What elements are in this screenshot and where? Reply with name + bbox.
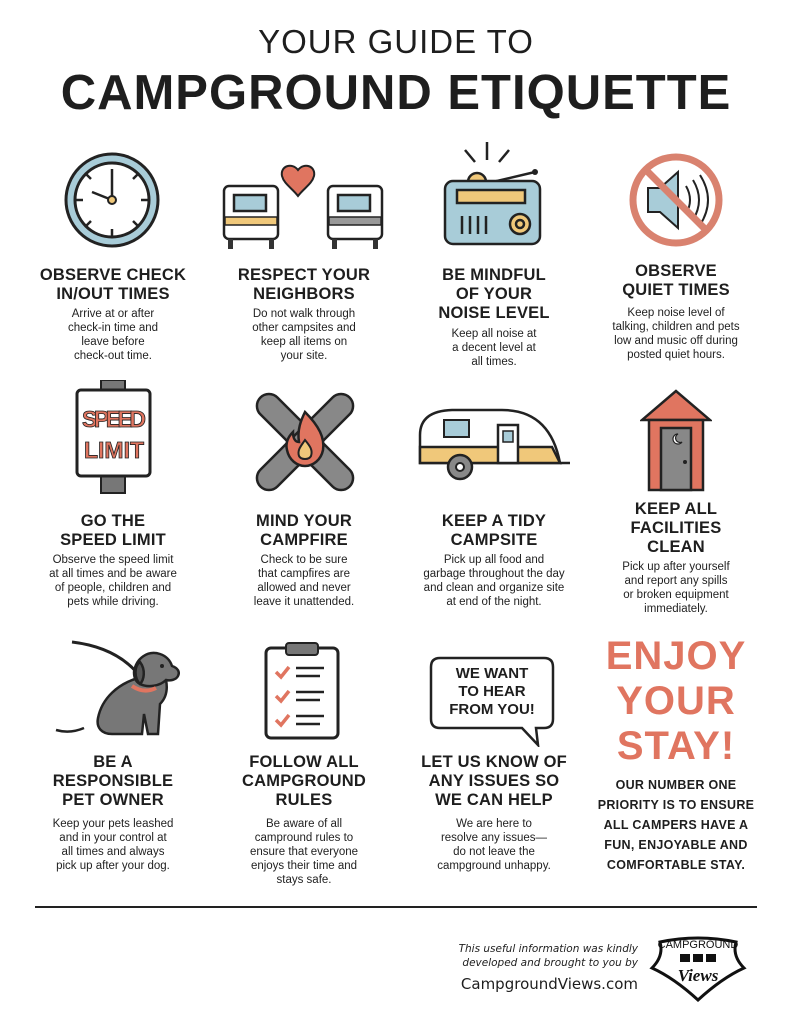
icon: no sound [630,154,722,246]
icon: speech bubble [430,656,554,747]
text: check in: leave before [81,336,145,348]
heading: tidy [442,512,546,549]
text: facilities: and report any spills [625,575,727,587]
icon: clock [64,152,160,248]
icon: outhouse [640,389,712,492]
text: campfire [254,554,354,608]
heading: facilities: FACILITIES [631,519,721,537]
heading: neighbors: RESPECT YOUR [238,266,370,284]
title: CAMPGROUND ETIQUETTE [61,66,731,120]
icon: speech bubble: WE WANT [456,665,528,682]
text: quiet: talking, children and pets [612,321,740,333]
text: issues [437,818,551,872]
heading: speed: SPEED LIMIT [60,531,166,549]
text: pet: Keep your pets leashed [53,818,173,830]
text: facilities [622,561,730,615]
text: speed: Observe the speed limit [53,554,173,566]
text: tidy [423,554,565,608]
icon: camper trailer [418,408,570,480]
heading: campfire [256,512,352,549]
text: campfire: Check to be sure [261,554,347,566]
text: priority: COMFORTABLE STAY. [607,858,745,872]
heading: rules [242,753,366,809]
text: rules: Be aware of all [266,818,342,830]
heading: rules: FOLLOW ALL [249,753,359,771]
text: tidy: at end of the night. [446,596,542,608]
footer credit [459,943,638,993]
footer credit: CampgroundViews.com [461,975,638,993]
text: priority: ALL CAMPERS HAVE A [604,818,748,832]
text: issues: do not leave the [453,846,535,858]
text: rules: ensure that everyone [250,846,358,858]
heading: rules: CAMPGROUND [242,772,366,790]
footer credit: This useful information was kindly [459,943,638,955]
title: YOUR GUIDE TO [258,23,534,60]
text: noise [451,328,537,368]
heading: tidy: CAMPSITE [451,531,537,549]
heading: issues: ANY ISSUES SO [429,772,559,790]
text: check in: check-out time. [74,350,152,362]
text: issues: We are here to [456,818,532,830]
heading: issues [421,753,567,809]
text: campfire: that campfires are [258,568,350,580]
text: priority: OUR NUMBER ONE [616,778,736,792]
text: priority: FUN, ENJOYABLE AND [604,838,748,852]
text: priority: PRIORITY IS TO ENSURE [598,798,754,812]
icon: dog [56,640,180,736]
text: quiet: posted quiet hours. [627,349,725,361]
icon: speech bubble: FROM YOU! [449,701,535,718]
heading: noise [438,266,550,322]
text: pet [53,818,173,872]
heading: campfire: MIND YOUR [256,512,352,530]
heading: neighbors: NEIGHBORS [253,285,355,303]
heading: noise: BE MINDFUL [442,266,546,284]
title [61,23,731,120]
text: quiet: low and music off during [614,335,738,347]
footer credit: developed and brought to you by [462,957,638,969]
callout: enjoy your stay: ENJOY [606,634,746,678]
callout: enjoy your stay: STAY! [617,724,735,768]
heading: neighbors [238,266,370,303]
text: priority [598,778,754,872]
text: facilities: Pick up after yourself [622,561,730,573]
heading: quiet: OBSERVE [635,262,717,280]
icon: radio [444,142,542,246]
heading: speed [60,512,166,549]
heading: pet: PET OWNER [62,791,164,809]
logo: CAMPGROUND [658,939,738,951]
text: issues: campground unhappy. [437,860,551,872]
heading: check in [40,266,186,303]
heading: quiet [622,262,730,299]
icon: campfire [256,392,354,492]
text: quiet: Keep noise level of [627,307,725,319]
text: rules: enjoys their time and [251,860,357,872]
heading: facilities: CLEAN [647,538,705,556]
text: noise: a decent level at [452,342,536,354]
heading: speed: GO THE [81,512,145,530]
text: facilities: immediately. [644,603,708,615]
text: speed: pets while driving. [67,596,159,608]
text: speed [49,554,177,608]
text: neighbors: keep all items on [261,336,347,348]
icon: clipboard [264,642,340,740]
text: rules [250,818,358,886]
logo [650,936,746,1002]
text: neighbors: other campsites and [252,322,356,334]
icon: speech bubble: TO HEAR [458,683,526,700]
text: check in: check-in time and [68,322,158,334]
heading: rules: RULES [276,791,332,809]
text: tidy: Pick up all food and [444,554,544,566]
heading: noise: OF YOUR [456,285,532,303]
text: facilities: or broken equipment [623,589,729,601]
heading: facilities [631,500,721,556]
callout: enjoy your stay [606,634,746,768]
text: check in [68,308,158,362]
icon: speed limit: LIMIT [84,437,144,463]
logo: Views [678,966,719,985]
text: neighbors: your site. [281,350,327,362]
text: rules: campround rules to [255,832,353,844]
heading: issues: WE CAN HELP [435,791,553,809]
text: campfire: allowed and never [257,582,351,594]
heading: issues: LET US KNOW OF [421,753,567,771]
text: rules: stays safe. [277,874,331,886]
heading: pet: RESPONSIBLE [53,772,173,790]
text: tidy: and clean and organize site [424,582,564,594]
heading: check in: OBSERVE CHECK [40,266,186,284]
icon: speed limit: SPEED [82,406,146,432]
text: noise: all times. [471,356,517,368]
text: speed: at all times and be aware [49,568,177,580]
icon: neighbors [222,164,384,249]
icon: speed limit [76,380,152,494]
heading: noise: NOISE LEVEL [438,304,550,322]
heading: pet: BE A [93,753,133,771]
callout: enjoy your stay: YOUR [616,679,736,723]
text: quiet [612,307,740,361]
heading: check in: IN/OUT TIMES [56,285,170,303]
text: issues: resolve any issues— [441,832,547,844]
text: speed: of people, children and [55,582,171,594]
heading: campfire: CAMPFIRE [260,531,348,549]
text: pet: and in your control at [59,832,167,844]
text: pet: pick up after your dog. [56,860,170,872]
heading: pet [53,753,173,809]
text: neighbors: Do not walk through [253,308,355,320]
text: pet: all times and always [62,846,164,858]
heading: tidy: KEEP A TIDY [442,512,546,530]
heading: quiet: QUIET TIMES [622,281,730,299]
text: check in: Arrive at or after [72,308,154,320]
heading: facilities: KEEP ALL [635,500,717,518]
text: tidy: garbage throughout the day [423,568,565,580]
text: neighbors [252,308,356,362]
text: noise: Keep all noise at [451,328,537,340]
text: campfire: leave it unattended. [254,596,354,608]
